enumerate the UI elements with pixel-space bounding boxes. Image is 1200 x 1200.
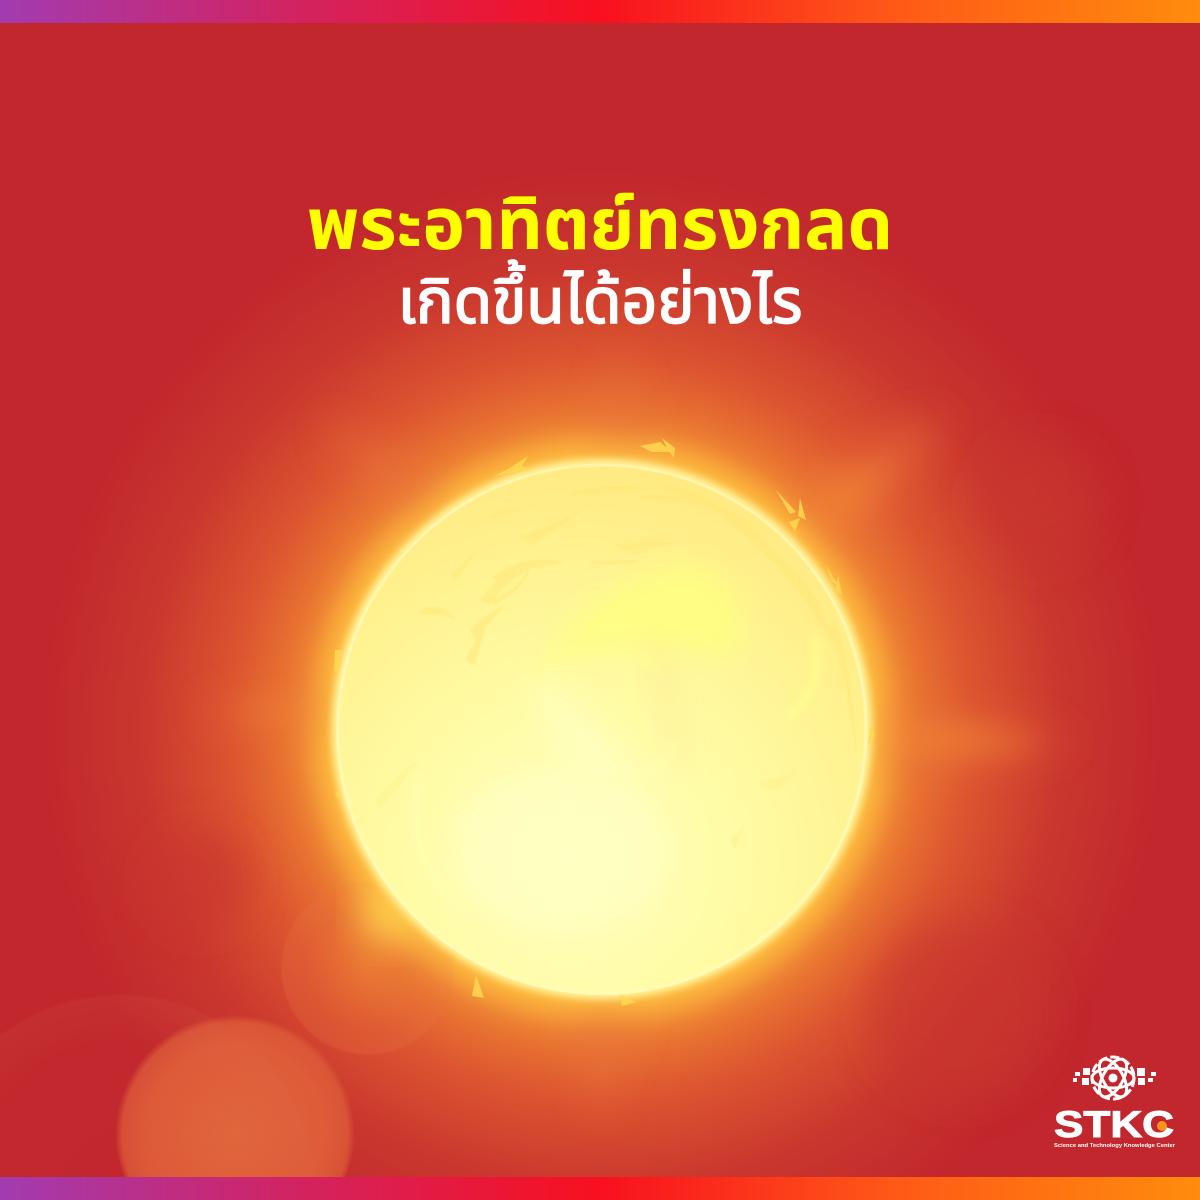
- lens flare: large disc: [115, 1009, 355, 1177]
- outer glow: [42, 169, 1158, 1200]
- logo icon: atom: [1092, 1055, 1134, 1101]
- top gradient bar: [0, 0, 1200, 23]
- warm glow bottom-left of sun: [362, 889, 414, 941]
- logo wordmark: STKC: [1054, 1104, 1174, 1145]
- sun swirl texture: [338, 465, 866, 993]
- solar prominences: [334, 438, 875, 1006]
- logo: STKC: [1054, 1055, 1176, 1149]
- orange ray core: [230, 465, 1040, 760]
- logo tagline: Science and Technology Knowledge Center: [1054, 1143, 1176, 1149]
- bottom gradient bar: [0, 1177, 1200, 1200]
- sun glow: [320, 447, 884, 1011]
- lens flare: faint arc: [0, 990, 320, 1177]
- sun: [332, 459, 872, 999]
- dark gaps between rays: [150, 440, 1100, 1100]
- logo pixels: [1073, 1068, 1156, 1085]
- logo dot: [1157, 1121, 1167, 1131]
- lens flare: small disc: [280, 880, 456, 1056]
- title line 1: พระอาทิตย์ทรงกลด: [307, 185, 893, 265]
- title: [307, 185, 893, 337]
- wisps: [376, 487, 855, 848]
- title line 2: เกิดขึ้นได้อย่างไร: [398, 259, 802, 337]
- corona rays: [195, 345, 1075, 1120]
